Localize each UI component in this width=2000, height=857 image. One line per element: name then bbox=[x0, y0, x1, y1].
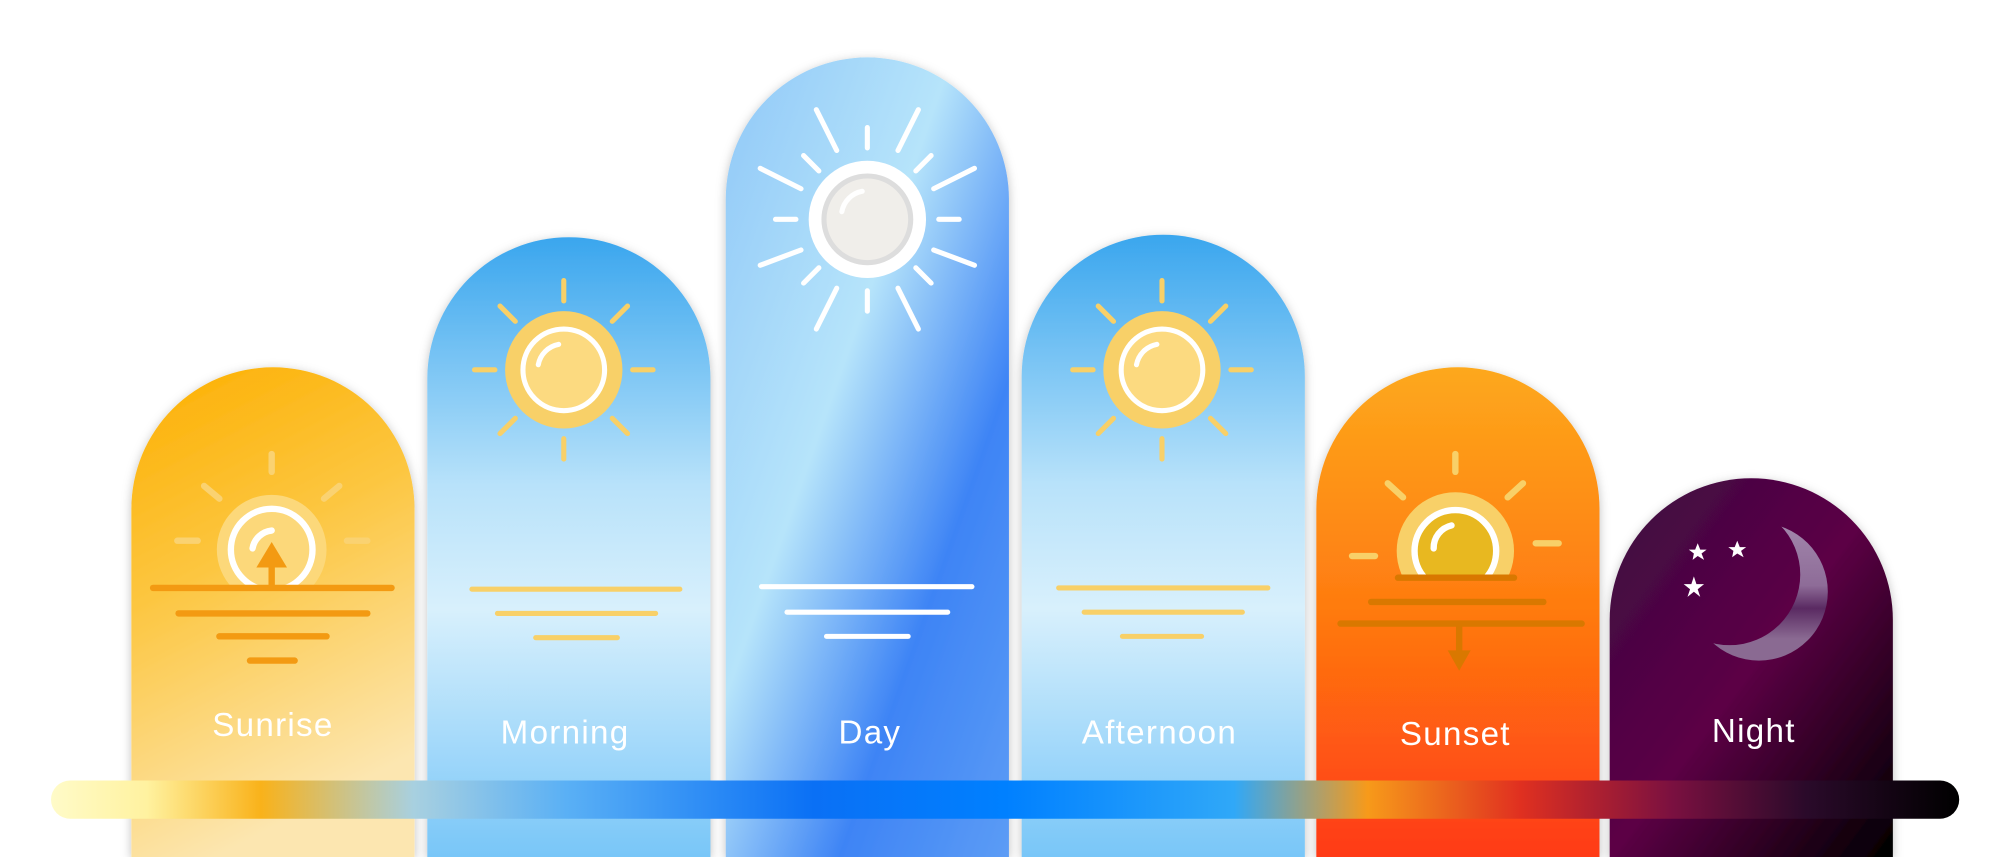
card: sunset bbox=[1316, 367, 1599, 857]
label: sunset: Sunset bbox=[1400, 716, 1511, 753]
label: afternoon: Afternoon bbox=[1082, 715, 1237, 751]
icon: day sun bbox=[760, 110, 974, 636]
card: sunrise bbox=[131, 367, 415, 857]
icon: moon and stars bbox=[1684, 526, 1828, 661]
label: sunrise: Sunrise bbox=[212, 707, 334, 744]
card: morning bbox=[427, 237, 710, 857]
label: day: Day bbox=[838, 715, 901, 751]
gradient timeline bar bbox=[51, 780, 1959, 819]
icon: afternoon sun bbox=[1059, 281, 1268, 636]
card: afternoon bbox=[1022, 235, 1305, 857]
card: night bbox=[1610, 478, 1893, 857]
label: morning: Morning bbox=[501, 715, 629, 751]
icon: sunset sun bbox=[1341, 454, 1582, 671]
icon: sunrise sun bbox=[153, 454, 392, 661]
label: night: Night bbox=[1712, 713, 1796, 750]
card: day bbox=[726, 57, 1009, 857]
icon: morning sun bbox=[472, 281, 680, 638]
